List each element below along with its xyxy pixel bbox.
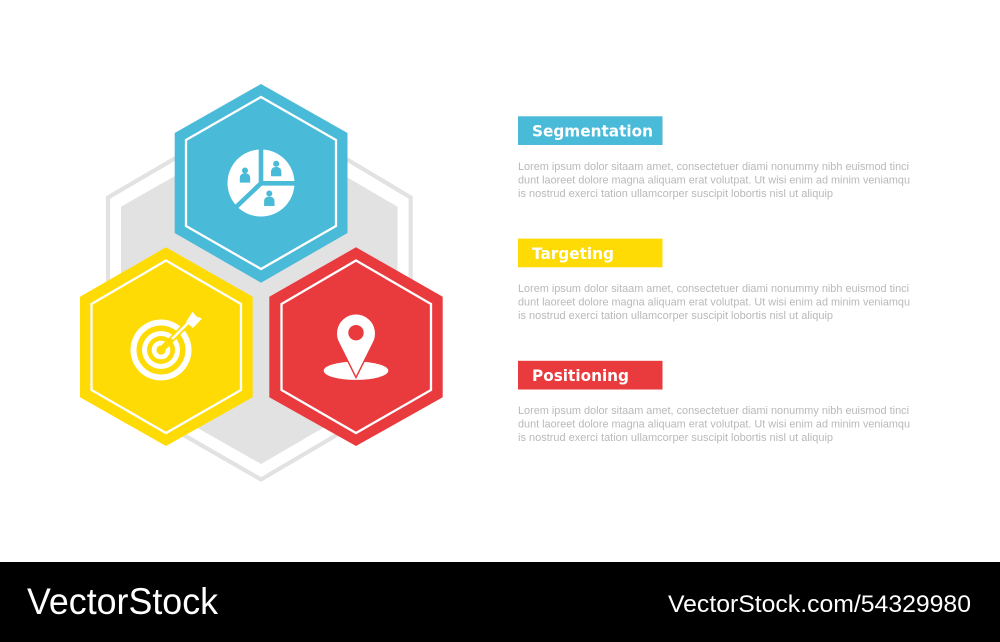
- text block: targeting: Lorem ipsum dolor sitaam amet, consectetuer diami nonummy nibh euismod tinci: [518, 283, 909, 295]
- text block: segmentation: Lorem ipsum dolor sitaam amet, consectetuer diami nonummy nibh euismod tinci: [518, 161, 909, 173]
- footer logo: VectorStock: [27, 581, 218, 622]
- icon: pie chart with people: [228, 148, 296, 216]
- footer image id: VectorStock.com/54329980: [668, 591, 971, 618]
- hexagon: segmentation: [175, 84, 348, 283]
- text block: positioning: is nostrud exerci tation ullamcorper suscipit lobortis nisl ut aliquip: [518, 432, 833, 444]
- hexagon: targeting: [80, 247, 253, 446]
- text block: positioning: dunt laoreet dolore magna aliquam erat volutpat. Ut wisi enim ad minim veniamqu: [518, 418, 910, 430]
- text block: segmentation: is nostrud exerci tation ullamcorper suscipit lobortis nisl ut aliquip: [518, 188, 833, 200]
- text block: positioning: Lorem ipsum dolor sitaam amet, consectetuer diami nonummy nibh euismod tinci: [518, 405, 909, 417]
- footer bar: [0, 562, 1000, 642]
- label: segmentation: Segmentation: [532, 122, 653, 140]
- label: positioning: [518, 361, 662, 390]
- text block: segmentation: dunt laoreet dolore magna aliquam erat volutpat. Ut wisi enim ad minim veniamqu: [518, 174, 910, 186]
- icon: target with dart: [130, 312, 202, 380]
- label: segmentation: [518, 116, 662, 145]
- text block: targeting: [518, 283, 910, 322]
- label: positioning: Positioning: [532, 366, 629, 385]
- text block: segmentation: [518, 161, 910, 200]
- text block: targeting: is nostrud exerci tation ullamcorper suscipit lobortis nisl ut aliquip: [518, 310, 833, 322]
- icon: map pin: [324, 314, 388, 380]
- background hexagon: grey: [108, 108, 411, 480]
- hexagon: positioning: [269, 247, 443, 446]
- label: targeting: [518, 239, 662, 267]
- text block: targeting: dunt laoreet dolore magna aliquam erat volutpat. Ut wisi enim ad minim veniamqu: [518, 296, 910, 308]
- text block: positioning: [518, 405, 910, 444]
- label: targeting: Targeting: [532, 244, 614, 263]
